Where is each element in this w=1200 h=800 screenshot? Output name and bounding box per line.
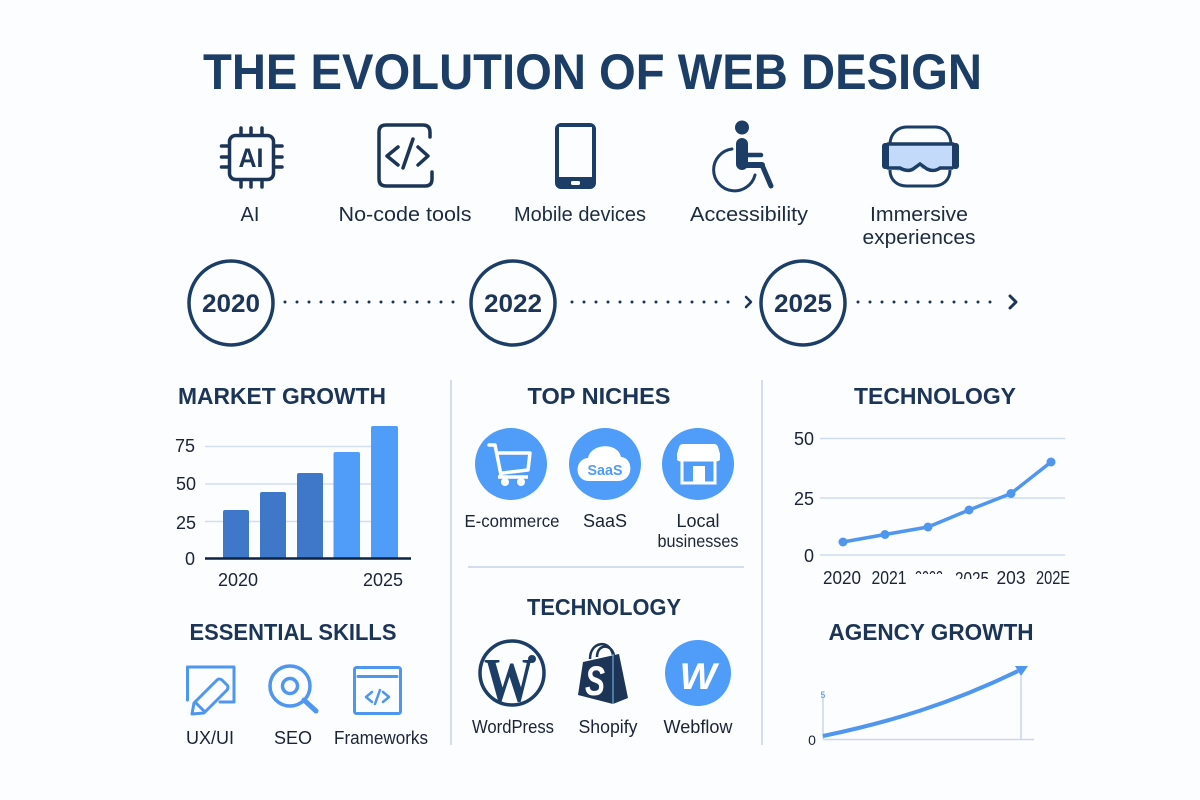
bar chart: 2025 — [363, 570, 403, 590]
label: Shopify: Shopify — [578, 717, 638, 737]
icon: AI chip — [222, 128, 282, 187]
icon: SEO — [270, 666, 316, 711]
heading: market growth: MARKET GROWTH — [178, 383, 386, 409]
line chart: 2020 — [823, 568, 861, 588]
label: accessibility: Accessibility — [690, 204, 808, 226]
icon: mobile device — [555, 123, 596, 189]
icon: WordPress: W — [484, 647, 534, 715]
bar chart: 2020 — [218, 570, 258, 590]
icon: frameworks — [354, 668, 400, 714]
milestone: 2025 — [761, 261, 845, 345]
timeline — [189, 261, 1016, 345]
line chart — [794, 429, 1070, 589]
icon: Webflow: W — [680, 656, 720, 697]
area chart with growth arrow — [808, 666, 1034, 748]
icon: Shopify bag: S — [585, 657, 605, 704]
panel: agency growth — [808, 619, 1034, 748]
heading: essential skills: ESSENTIAL SKILLS — [190, 619, 396, 645]
heading: top niches: TOP NICHES — [528, 383, 670, 409]
icon: VR headset — [882, 127, 959, 186]
icon: accessibility — [714, 120, 771, 191]
milestone: 2020: 2020 — [202, 290, 260, 318]
heading: technology chart: TECHNOLOGY — [854, 383, 1016, 409]
icon: no-code tools — [379, 125, 432, 186]
panel: essential skills — [186, 619, 428, 748]
bar chart: 50 — [176, 474, 196, 494]
milestone: 2022 — [471, 261, 555, 345]
label: e-commerce: E-commerce — [464, 511, 560, 531]
icon: UX/UI — [188, 667, 234, 714]
label: SEO: SEO — [274, 728, 312, 748]
line chart: 50 — [794, 429, 814, 449]
panel: market growth — [175, 383, 411, 590]
label: UX/UI: UX/UI — [186, 728, 234, 748]
label: WordPress: WordPress — [472, 717, 554, 737]
title: THE EVOLUTION OF WEB DESIGN — [203, 44, 982, 100]
icon: local business storefront — [662, 428, 734, 500]
area chart with growth arrow: 0 — [808, 732, 816, 748]
label: frameworks: Frameworks — [334, 728, 428, 748]
label: mobile devices: Mobile devices — [514, 204, 646, 226]
icon: SaaS cloud: SaaS — [588, 462, 622, 479]
arrow: beyond 2025 — [1010, 296, 1016, 308]
label: immersive experiences: Immersive — [870, 204, 968, 226]
milestone: 2020 — [189, 261, 273, 345]
bar chart — [175, 426, 411, 590]
icon: Shopify bag — [578, 644, 628, 704]
heading: technology: TECHNOLOGY — [527, 594, 681, 620]
arrow: 2022 to 2025 — [746, 297, 751, 307]
panel: technology line chart — [794, 383, 1070, 589]
label: Webflow: Webflow — [664, 717, 733, 737]
label: no-code tools: No-code tools — [338, 204, 472, 226]
bar chart: 25 — [176, 513, 196, 533]
icon: Webflow — [665, 640, 731, 706]
line chart: 0 — [804, 546, 814, 566]
label: local businesses — [658, 511, 739, 551]
line chart: 2022 — [915, 568, 943, 588]
line chart: 25 — [794, 489, 814, 509]
area chart with growth arrow: 5 — [820, 690, 826, 700]
bar chart: 0 — [185, 549, 195, 569]
bar chart: 75 — [175, 436, 195, 456]
panel: trends — [222, 120, 976, 249]
label: AI: AI — [241, 204, 259, 226]
icon: AI chip: AI — [238, 143, 264, 173]
label: local businesses: Local — [676, 511, 720, 531]
heading: agency growth: AGENCY GROWTH — [828, 619, 1034, 645]
label: immersive experiences — [862, 204, 976, 249]
line chart: 203 — [996, 568, 1026, 588]
panel: technology logos — [472, 594, 733, 737]
milestone: 2025: 2025 — [774, 290, 832, 318]
line chart: 202E — [1036, 568, 1070, 588]
panel: top niches — [464, 383, 739, 551]
line chart: 2025 — [955, 569, 989, 589]
icon: e-commerce cart — [475, 428, 547, 500]
milestone: 2022: 2022 — [484, 290, 542, 318]
line chart: 2021 — [872, 568, 906, 588]
label: immersive experiences: experiences — [862, 227, 976, 249]
icon: SaaS cloud — [569, 428, 641, 500]
label: local businesses: businesses — [658, 531, 739, 551]
label: SaaS: SaaS — [583, 511, 627, 531]
